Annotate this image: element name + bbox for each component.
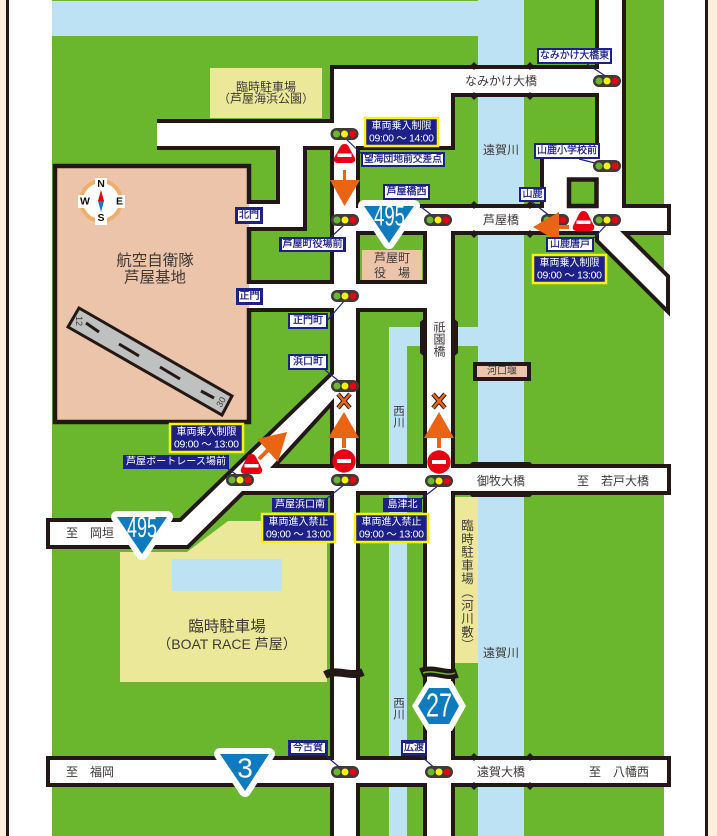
callout: vehicle limit until 14:00 — [365, 118, 438, 146]
label: 山鹿唐戸: 山鹿唐戸 — [550, 237, 590, 250]
parking area: river bed — [455, 497, 478, 663]
label: 山鹿小学校前: 山鹿小学校前 — [537, 144, 597, 156]
river: Onga river and sea — [52, 0, 524, 836]
runway: 12 — [74, 316, 84, 326]
callout: no entry road A: 車両進入禁止 — [268, 515, 328, 528]
town hall: 役 場 — [374, 265, 410, 280]
map text labels: 西川 — [392, 405, 405, 428]
route 495 north sign: 495 — [374, 200, 405, 232]
road break marks — [325, 671, 457, 675]
compass — [78, 178, 125, 225]
callout: vehicle limit boat race — [170, 424, 243, 452]
air base grounds — [55, 166, 250, 422]
callout: no entry road A: 09:00 ～ 13:00 — [266, 528, 331, 540]
label: 芦屋町役場前 — [279, 237, 346, 252]
runway: 30 — [214, 395, 228, 409]
map text labels — [66, 74, 649, 779]
compass: N — [97, 178, 105, 190]
town hall — [362, 250, 422, 280]
label: 島津北 — [383, 498, 422, 512]
arrow: north-east on diagonal road — [257, 432, 287, 462]
callout: no entry road B: 09:00 ～ 13:00 — [359, 528, 424, 540]
block island near Yamaga — [569, 180, 596, 206]
map text labels: 至 — [66, 765, 78, 779]
callout: no entry road B: 車両進入禁止 — [362, 515, 422, 528]
label: 望海団地前交差点 — [361, 152, 445, 167]
callout: vehicle limit until 14:00: 09:00 ～ 14:00 — [369, 132, 434, 144]
parking area: BOAT RACE Ashiya — [120, 521, 327, 682]
label: 芦屋町役場前: 芦屋町役場前 — [282, 237, 342, 250]
no-entry marks — [241, 144, 594, 474]
map text labels: 福岡 — [90, 764, 114, 779]
pond — [172, 559, 282, 591]
route 495 south sign: 495 — [127, 512, 157, 544]
bridges — [420, 62, 534, 790]
map text labels: なみかけ大橋 — [465, 74, 537, 88]
label: 望海団地前交差点: 望海団地前交差点 — [364, 152, 442, 165]
callout: vehicle limit boat race: 09:00 ～ 13:00 — [174, 438, 239, 450]
weir: Kawaguchi: 河口堰 — [487, 365, 517, 377]
map text labels: （BOAT RACE 芦屋） — [157, 636, 297, 652]
label: 芦屋橋西: 芦屋橋西 — [386, 184, 426, 198]
label: 山鹿 — [519, 187, 546, 202]
map text labels: 遠賀川 — [483, 646, 519, 660]
map text labels: （芦屋海浜公園） — [218, 92, 314, 106]
town hall: 芦屋町 — [374, 251, 410, 265]
map text labels: 八幡西 — [613, 764, 649, 779]
callout: vehicle limit Yamaga: 09:00 ～ 13:00 — [537, 270, 602, 282]
route 27 sign — [412, 681, 466, 731]
route 495 south sign — [117, 512, 167, 554]
label: 正門 — [236, 288, 263, 305]
callout: vehicle limit until 14:00: 車両乗入制限 — [372, 119, 432, 132]
map text labels: 臨時駐車場（河川敷） — [459, 519, 473, 652]
map text labels: 至 — [66, 526, 78, 540]
callout: vehicle limit Yamaga — [533, 255, 606, 283]
label: 山鹿小学校前 — [534, 143, 600, 159]
arrow: north on road B — [424, 412, 454, 448]
route 495 north sign — [364, 200, 414, 243]
callout: vehicle limit boat race: 車両乗入制限 — [176, 425, 236, 438]
label: 島津北: 島津北 — [388, 498, 418, 510]
map text labels: 御牧大橋 — [477, 473, 525, 488]
map text labels: 至 — [589, 765, 601, 779]
map text labels: 臨時駐車場 — [236, 79, 296, 94]
arrow: west on Ashiya bridge — [533, 212, 569, 242]
label: 今古賀 — [288, 740, 328, 756]
compass: E — [116, 196, 123, 208]
label: 正門町: 正門町 — [293, 314, 323, 326]
traffic lights — [226, 75, 621, 778]
compass: S — [97, 212, 105, 224]
map text labels: 芦屋橋 — [483, 213, 519, 227]
leader lines — [225, 64, 607, 772]
arrow: south on road A — [330, 170, 360, 206]
map text labels: 若戸大橋 — [601, 474, 649, 488]
river: Nishikawa — [389, 327, 480, 836]
arrow: north on road A — [328, 412, 359, 448]
label: 山鹿: 山鹿 — [522, 187, 542, 200]
compass: W — [80, 196, 90, 208]
parking area: Ashiya Kaihin Park — [210, 68, 322, 118]
route 27 sign: 27 — [426, 686, 452, 724]
map text labels: 芦屋基地 — [124, 268, 186, 286]
label: 芦屋浜口南: 芦屋浜口南 — [275, 498, 325, 510]
callout: vehicle limit Yamaga: 車両乗入制限 — [540, 256, 600, 269]
route 3 sign — [220, 752, 269, 791]
label: 芦屋橋西 — [383, 184, 430, 200]
route 3 sign: 3 — [237, 752, 253, 784]
map text labels: 遠賀川 — [483, 143, 519, 157]
label: 浜口町 — [288, 354, 328, 370]
label: 正門: 正門 — [240, 290, 260, 302]
closed marks — [338, 394, 445, 408]
label: 北門 — [235, 207, 263, 224]
map text labels: 臨時駐車場 — [188, 618, 266, 636]
label: 正門町 — [288, 313, 328, 329]
label: なみかけ大橋東: なみかけ大橋東 — [540, 48, 609, 62]
label: なみかけ大橋東 — [537, 48, 612, 64]
label: 芦屋浜口南 — [272, 498, 328, 512]
map text labels: 遠賀大橋 — [477, 765, 525, 779]
map text labels: 祇園橋 — [432, 321, 446, 358]
map text labels: 至 — [577, 474, 589, 488]
label: 今古賀: 今古賀 — [293, 740, 323, 754]
label: 山鹿唐戸 — [546, 237, 594, 252]
weir: Kawaguchi — [475, 364, 529, 379]
label: 北門: 北門 — [239, 209, 259, 221]
map text labels: 航空自衛隊 — [116, 252, 194, 270]
runway — [68, 308, 232, 415]
callout: no entry road A — [262, 514, 335, 542]
label: 広渡 — [401, 740, 427, 756]
map text labels: 西川 — [392, 697, 405, 720]
label: 浜口町: 浜口町 — [293, 356, 323, 368]
label: 広渡: 広渡 — [404, 742, 424, 754]
callout: no entry road B — [355, 514, 428, 542]
label: 芦屋ボートレース場前: 芦屋ボートレース場前 — [126, 454, 226, 468]
map text labels: 岡垣 — [90, 526, 114, 540]
